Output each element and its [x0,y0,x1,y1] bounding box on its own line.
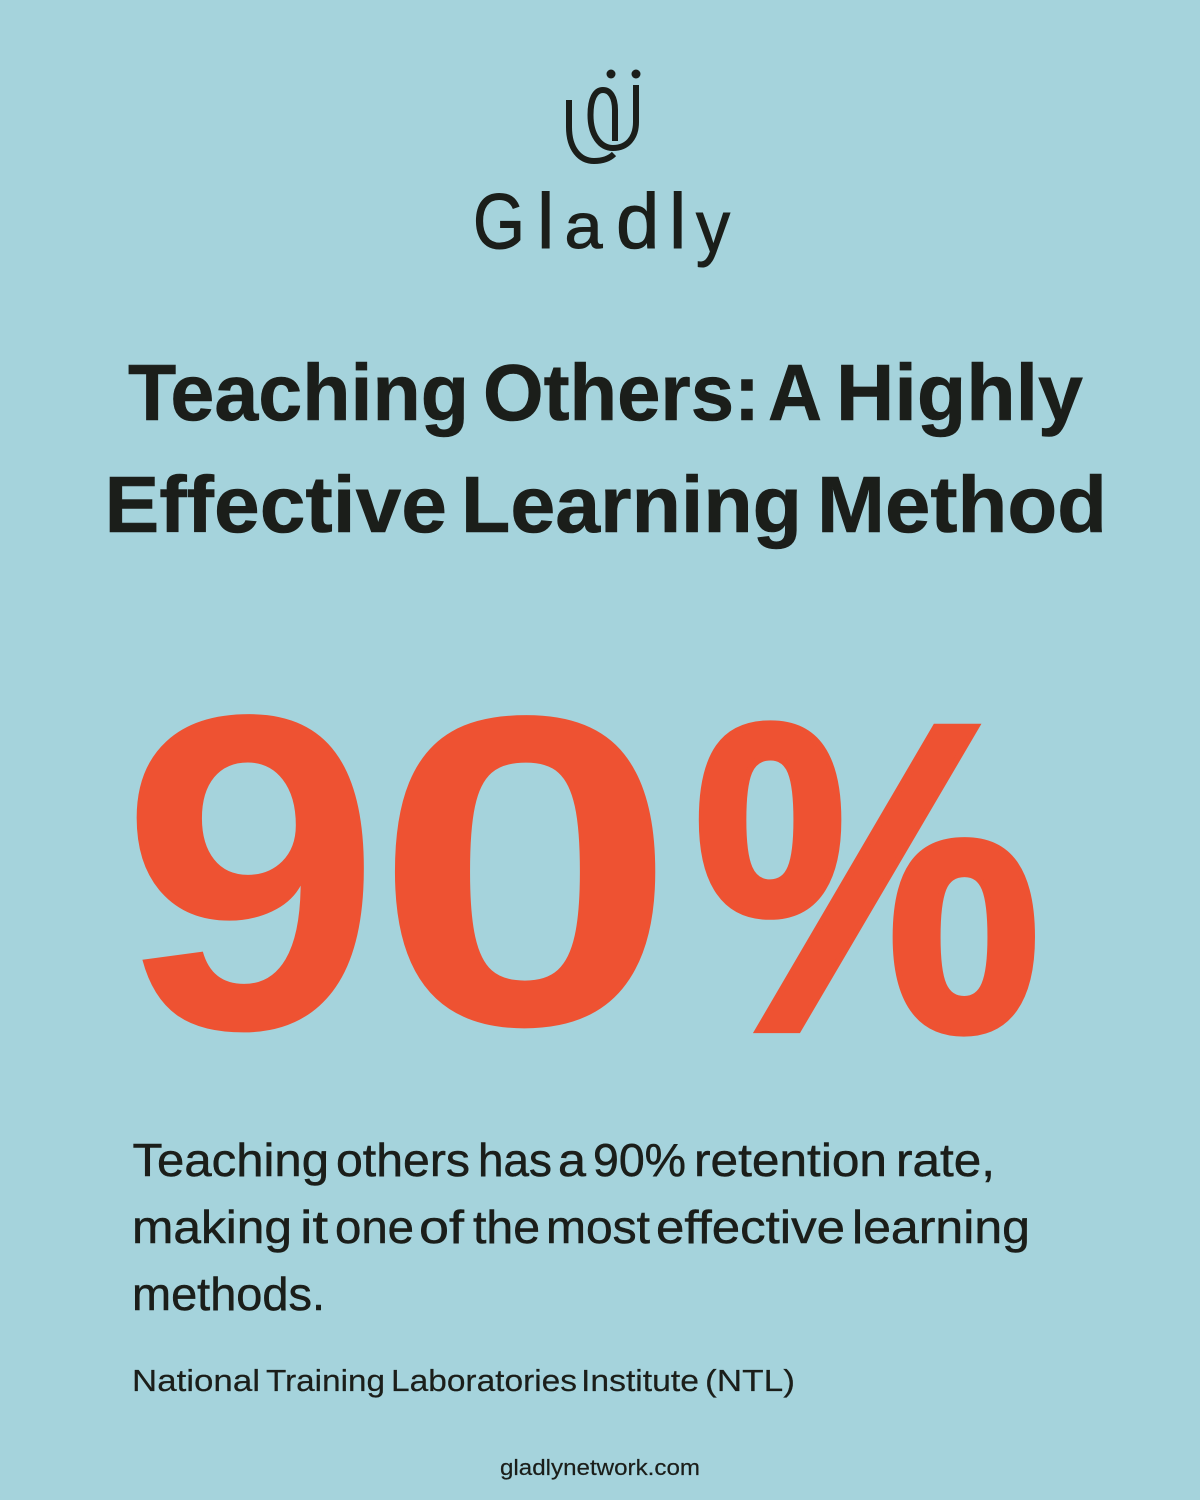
title [104,348,1107,549]
wordmark [473,177,731,268]
body text: of [419,1201,464,1253]
body text: a [558,1134,586,1186]
body text: most [546,1201,650,1253]
big statistic: 90%: % [692,633,1042,1123]
wordmark: l [669,177,686,265]
wordmark: d [616,177,659,265]
source citation: (NTL) [705,1363,795,1398]
title: Learning [461,460,802,549]
body text: 90% [593,1134,686,1186]
wordmark: a [564,190,603,262]
body text: learning [852,1201,1030,1253]
logo: Gladly [473,70,731,268]
body text: one [335,1201,414,1253]
title: Teaching [128,348,469,437]
title: A [768,348,822,437]
body text: retention [694,1134,887,1186]
body text: the [473,1201,540,1253]
source citation: Training [266,1363,385,1398]
big statistic: 90%: 0 [373,625,678,1118]
wordmark: G [473,177,525,265]
wordmark: l [537,177,554,265]
body text: Teaching [132,1134,329,1186]
body text: effective [656,1201,845,1253]
footer url: gladlynetwork.com [500,1455,700,1480]
source citation [132,1363,795,1398]
source citation: Laboratories [391,1363,577,1398]
title: Others: [483,348,760,437]
source citation: Institute [581,1363,699,1398]
big statistic: 90% [120,622,1042,1124]
source citation: National [132,1363,260,1398]
body text: has [478,1134,552,1186]
body text: methods. [132,1268,325,1320]
icon: paperclip face [569,70,640,161]
body text: others [336,1134,470,1186]
title: Method [817,460,1107,549]
body text: making [132,1201,292,1253]
title: Effective [104,460,447,549]
body text: rate, [896,1134,995,1186]
wordmark: y [696,186,731,268]
body text [132,1134,1030,1320]
body text: it [300,1201,328,1253]
title: Highly [836,348,1084,437]
big statistic: 90%: 9 [120,622,381,1124]
